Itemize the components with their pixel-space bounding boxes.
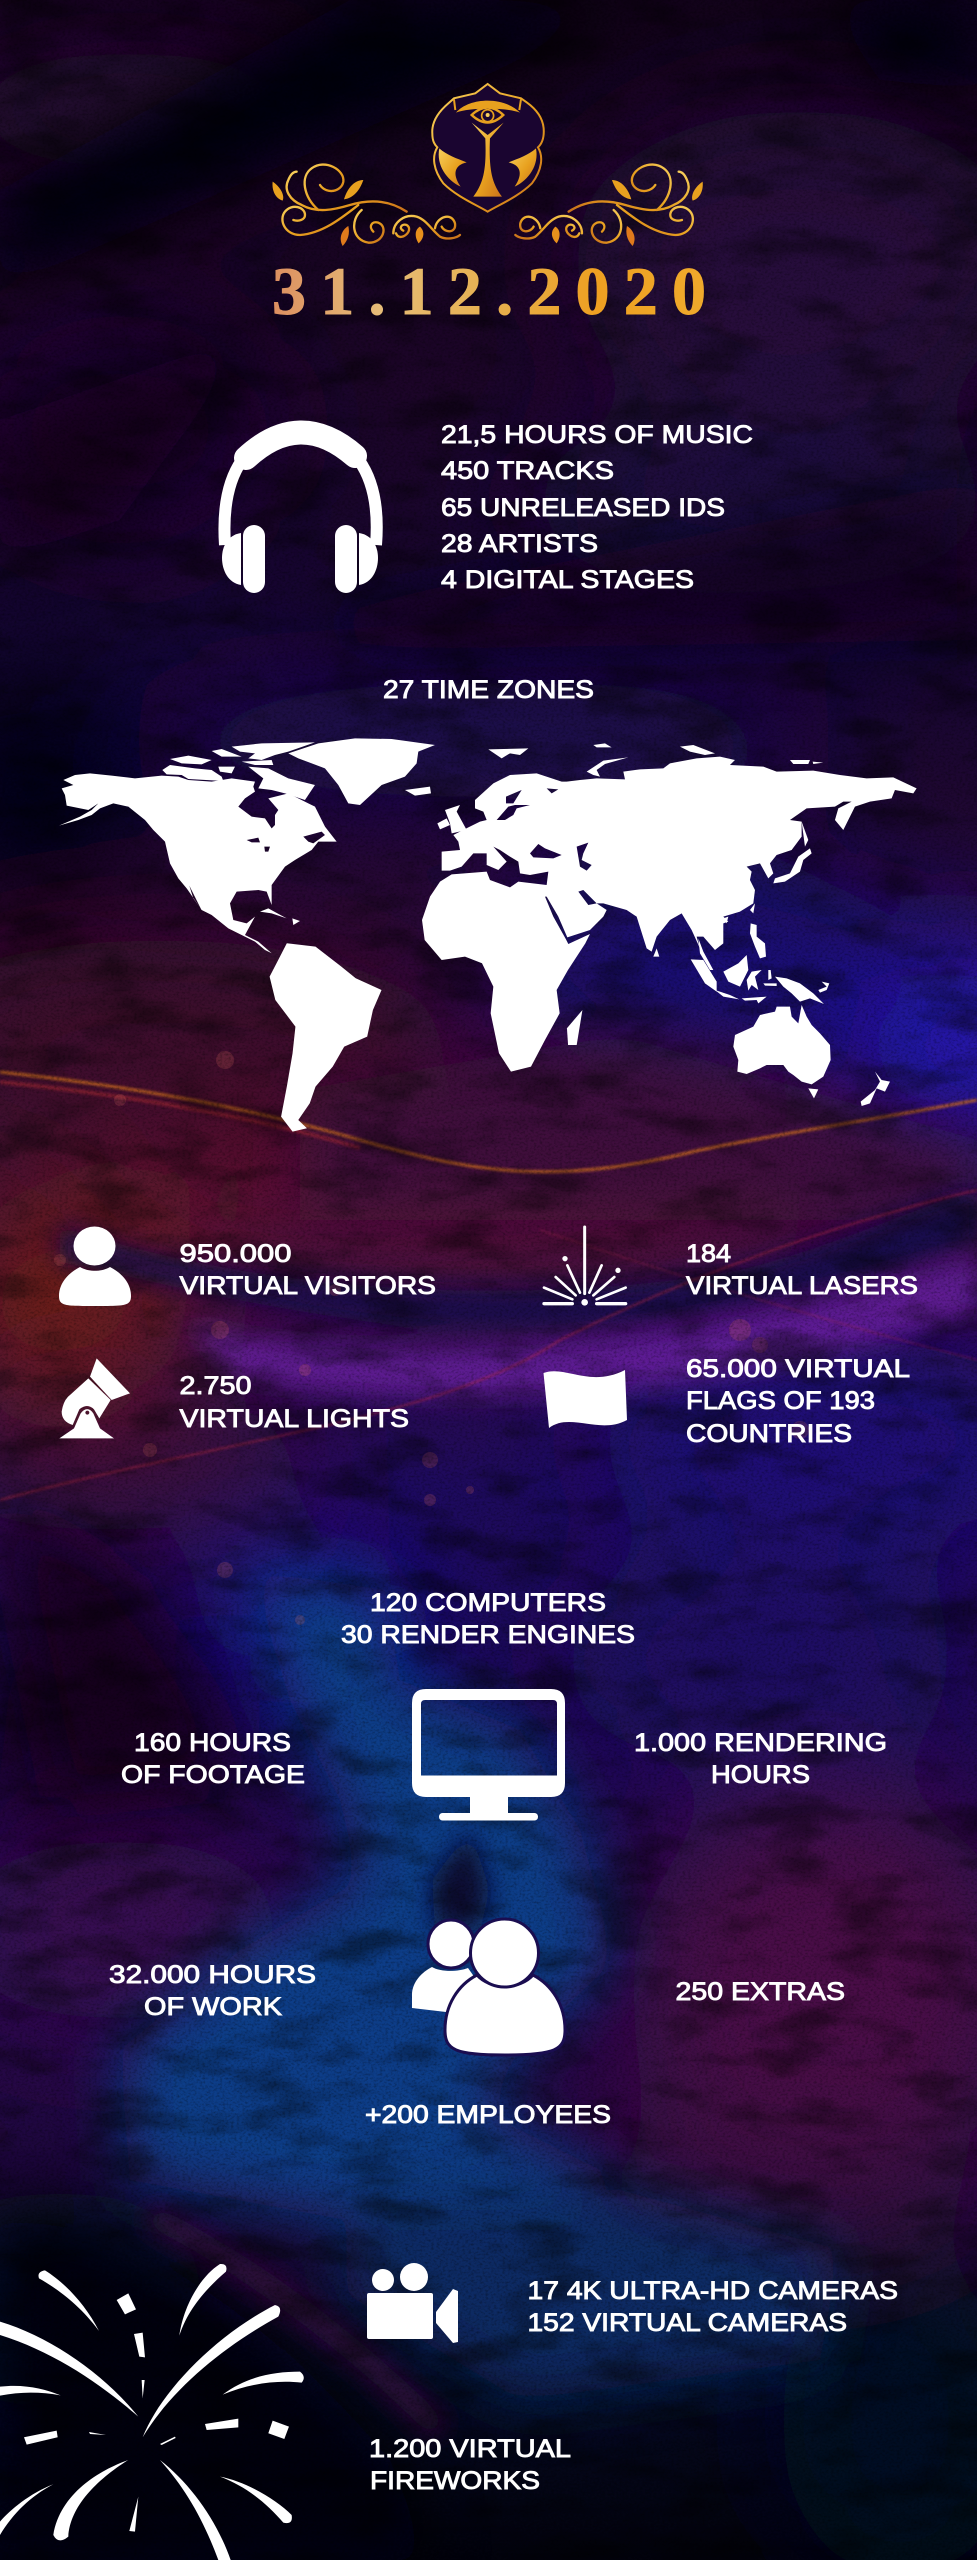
- icon: person: [59, 1226, 131, 1306]
- text: lights: VIRTUAL LIGHTS: [180, 1405, 409, 1433]
- text: hours of work: 32.000 HOURS: [109, 1961, 316, 1989]
- ornament: right flourish: [515, 165, 703, 246]
- heading: time zones: 27 TIME ZONES: [383, 676, 594, 704]
- text: lights: [180, 1372, 409, 1433]
- text: lasers: [686, 1240, 918, 1300]
- icon: video camera: [367, 2263, 458, 2343]
- text: fireworks: FIREWORKS: [370, 2467, 540, 2495]
- text: flags: [686, 1355, 910, 1448]
- text: flags: FLAGS OF 193: [686, 1387, 875, 1415]
- text: fireworks: 1.200 VIRTUAL: [369, 2435, 571, 2463]
- stat: virtual flags: [544, 1355, 910, 1448]
- text: music stats: 450 TRACKS: [441, 457, 614, 485]
- title: date: 31.12.2020: [272, 253, 706, 329]
- text: lasers: 184: [686, 1240, 731, 1268]
- text: computers and render engines: 120 COMPUTERS: [370, 1589, 606, 1617]
- icon: laser burst: [544, 1227, 626, 1306]
- text: rendering hours: [634, 1729, 887, 1789]
- stat: virtual visitors: [59, 1226, 436, 1306]
- map: southeast asia and oceania: [691, 903, 890, 1106]
- map: eurasia and africa: [422, 743, 917, 1072]
- text: hours of work: [109, 1961, 316, 2021]
- text: hours of footage: 160 HOURS: [134, 1729, 291, 1757]
- text: computers and render engines: [341, 1589, 635, 1649]
- text: visitors: 950.000: [180, 1240, 292, 1268]
- text: hours of footage: [121, 1729, 305, 1789]
- stat: virtual lights: [59, 1358, 409, 1438]
- text: music stats: 4 DIGITAL STAGES: [441, 566, 694, 594]
- map: madagascar: [567, 1010, 582, 1045]
- stat: virtual lasers: [544, 1227, 918, 1306]
- text: lights: 2.750: [180, 1372, 252, 1400]
- icon: stage light: [59, 1358, 130, 1438]
- map: north america and greenland: [59, 738, 435, 953]
- text: flags: 65.000 VIRTUAL: [686, 1355, 910, 1383]
- text: cameras: 17 4K ULTRA-HD CAMERAS: [528, 2277, 898, 2305]
- ornament: left flourish: [272, 165, 460, 246]
- text: flags: COUNTRIES: [686, 1420, 852, 1448]
- text: music stats: 65 UNRELEASED IDS: [441, 494, 725, 522]
- text: extras: 250 EXTRAS: [676, 1978, 845, 2006]
- icon: flag: [544, 1370, 627, 1428]
- logo: golden shield emblem: [432, 84, 544, 212]
- text: fireworks: [369, 2435, 571, 2495]
- icon: computer monitor: [412, 1689, 565, 1820]
- icon: fireworks: [0, 2264, 304, 2560]
- text: computers and render engines: 30 RENDER ENGINES: [341, 1621, 635, 1649]
- text: rendering hours: 1.000 RENDERING: [634, 1729, 887, 1757]
- text: visitors: [180, 1240, 436, 1300]
- text: music stats: 28 ARTISTS: [441, 530, 598, 558]
- text: cameras: [528, 2277, 898, 2337]
- icon: headphones: [222, 432, 378, 593]
- text: employees: +200 EMPLOYEES: [365, 2101, 611, 2129]
- icon: group of people: [412, 1919, 565, 2055]
- text: hours of work: OF WORK: [144, 1993, 282, 2021]
- text: cameras: 152 VIRTUAL CAMERAS: [528, 2309, 847, 2337]
- map: south america: [270, 943, 382, 1132]
- text: music stats: [441, 421, 753, 594]
- text: lasers: VIRTUAL LASERS: [686, 1272, 918, 1300]
- text: rendering hours: HOURS: [711, 1761, 810, 1789]
- text: visitors: VIRTUAL VISITORS: [180, 1272, 436, 1300]
- world map: [59, 738, 917, 1132]
- text: music stats: 21,5 HOURS OF MUSIC: [441, 421, 753, 449]
- text: hours of footage: OF FOOTAGE: [121, 1761, 305, 1789]
